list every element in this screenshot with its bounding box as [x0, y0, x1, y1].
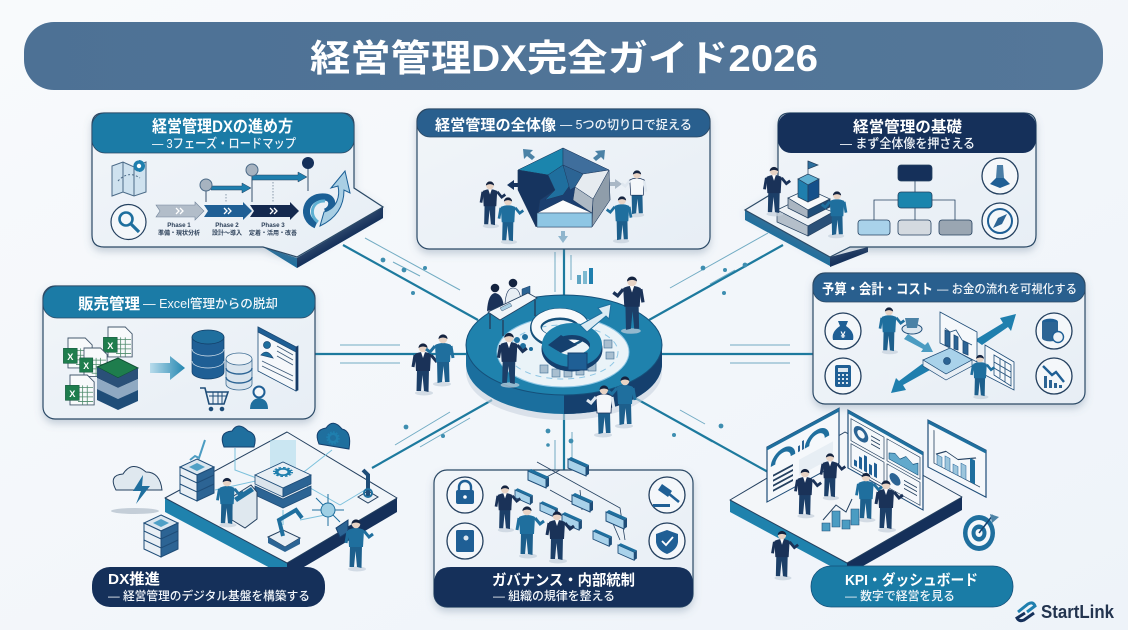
label: — 数字で経営を見る [845, 588, 955, 603]
icon: calculator [825, 358, 861, 394]
icon: operator [250, 386, 268, 409]
heading [417, 109, 710, 137]
heading [92, 113, 354, 153]
heading: 販売管理 [78, 294, 140, 313]
phase chevrons [156, 202, 299, 237]
inner circuit disc [497, 317, 629, 387]
icon: gavel [649, 477, 685, 513]
people [772, 453, 903, 580]
icon: money bag [825, 313, 861, 349]
heading: — まず全体像を押さえる [840, 136, 975, 151]
phase chevrons: 定着・活用・改善 [249, 229, 297, 237]
icon: network [312, 494, 344, 526]
phase chevrons: Phase 1 [167, 222, 191, 229]
icon: compass [982, 203, 1018, 239]
phase chevrons: 設計〜導入 [212, 229, 242, 237]
left dashboard [767, 408, 839, 502]
arrows [507, 149, 622, 243]
emblem: gear and arrow [536, 304, 611, 370]
banknotes [923, 348, 972, 380]
icon: curved arrow [306, 171, 350, 226]
icon: book [447, 523, 483, 559]
icon: stacked binders [97, 358, 138, 410]
pentagon diagram [518, 148, 610, 227]
coin stack [902, 318, 922, 334]
team at desk [487, 279, 537, 336]
icon: money bag: ¥ [840, 330, 846, 340]
heading [778, 113, 1036, 153]
panel: sales [43, 286, 315, 419]
heading: 経営管理の基礎 [853, 117, 962, 136]
heading: — 3フェーズ・ロードマップ [152, 136, 296, 151]
icon: target [963, 514, 999, 551]
isometric platform [730, 432, 962, 575]
heading: — Excel管理からの脱却 [143, 296, 278, 311]
icon: spreadsheets [63, 327, 132, 405]
icon: clouds [111, 423, 350, 514]
icon: map [112, 160, 146, 196]
heading [813, 273, 1085, 302]
icon: magnifier [111, 204, 146, 240]
label: — 経営管理のデジタル基盤を構築する [108, 588, 310, 603]
icon: coins [1036, 313, 1072, 349]
heading: 経営管理の全体像 [435, 116, 556, 134]
people [496, 485, 574, 564]
label [92, 567, 325, 607]
label: DX推進 [108, 570, 160, 588]
small chart [190, 440, 205, 460]
panel: DX promotion [92, 423, 397, 607]
heading: 予算・会計・コスト [822, 281, 933, 297]
panel: basics [745, 113, 1036, 267]
person with laptop [336, 519, 373, 572]
icon: cart [200, 388, 228, 411]
right dashboard [928, 420, 986, 497]
phase chevrons: 準備・現状分析 [158, 229, 200, 237]
flow arrows [891, 314, 1016, 393]
heading [43, 286, 315, 318]
panel: KPI dashboard [730, 408, 1013, 607]
icon: databases [192, 330, 252, 390]
icon: pillar [982, 158, 1018, 194]
milestones [200, 157, 314, 203]
heading: 経営管理DXの進め方 [152, 116, 293, 136]
center dashboard [848, 410, 923, 510]
icon: shield [649, 523, 685, 559]
panel: overview [417, 109, 710, 249]
central server [255, 440, 311, 508]
central hub [413, 276, 662, 438]
panel: governance [434, 457, 693, 607]
label: KPI・ダッシュボード [845, 571, 978, 589]
small chart near hub [577, 268, 593, 284]
isometric platform [165, 432, 397, 577]
icon: robot [358, 470, 378, 503]
panel: budget [813, 273, 1085, 404]
title bar [24, 22, 1103, 90]
org chart [858, 165, 972, 235]
icon: robot arm [268, 510, 302, 552]
logo: StartLink: StartLink [1041, 602, 1115, 622]
footer label [434, 567, 693, 607]
people [481, 170, 646, 244]
people around hub [413, 276, 643, 438]
icon: server stacks [144, 459, 214, 557]
people [880, 307, 994, 399]
growth bars [822, 499, 859, 531]
footer label: — 組織の規律を整える [493, 588, 615, 603]
circuit lines [215, 448, 365, 525]
heading: — お金の流れを可視化する [937, 281, 1077, 296]
icon: padlock [447, 477, 483, 513]
arrow [150, 356, 185, 380]
label [811, 566, 1013, 607]
title: 経営管理DX完全ガイド2026 [310, 38, 818, 79]
stepped block [777, 161, 833, 236]
footer label: ガバナンス・内部統制 [492, 572, 635, 589]
isometric charts [940, 312, 1014, 390]
org chart [515, 457, 637, 560]
phase chevrons: Phase 3 [261, 222, 285, 229]
phase chevrons: Phase 2 [215, 222, 239, 229]
connector lines [315, 233, 813, 472]
icon: profile window [258, 327, 298, 391]
panel: roadmap [92, 113, 383, 268]
people [764, 167, 846, 238]
icon: falling chart [1036, 358, 1072, 394]
heading: — 5つの切り口で捉える [560, 118, 692, 132]
operator and console [218, 478, 257, 528]
